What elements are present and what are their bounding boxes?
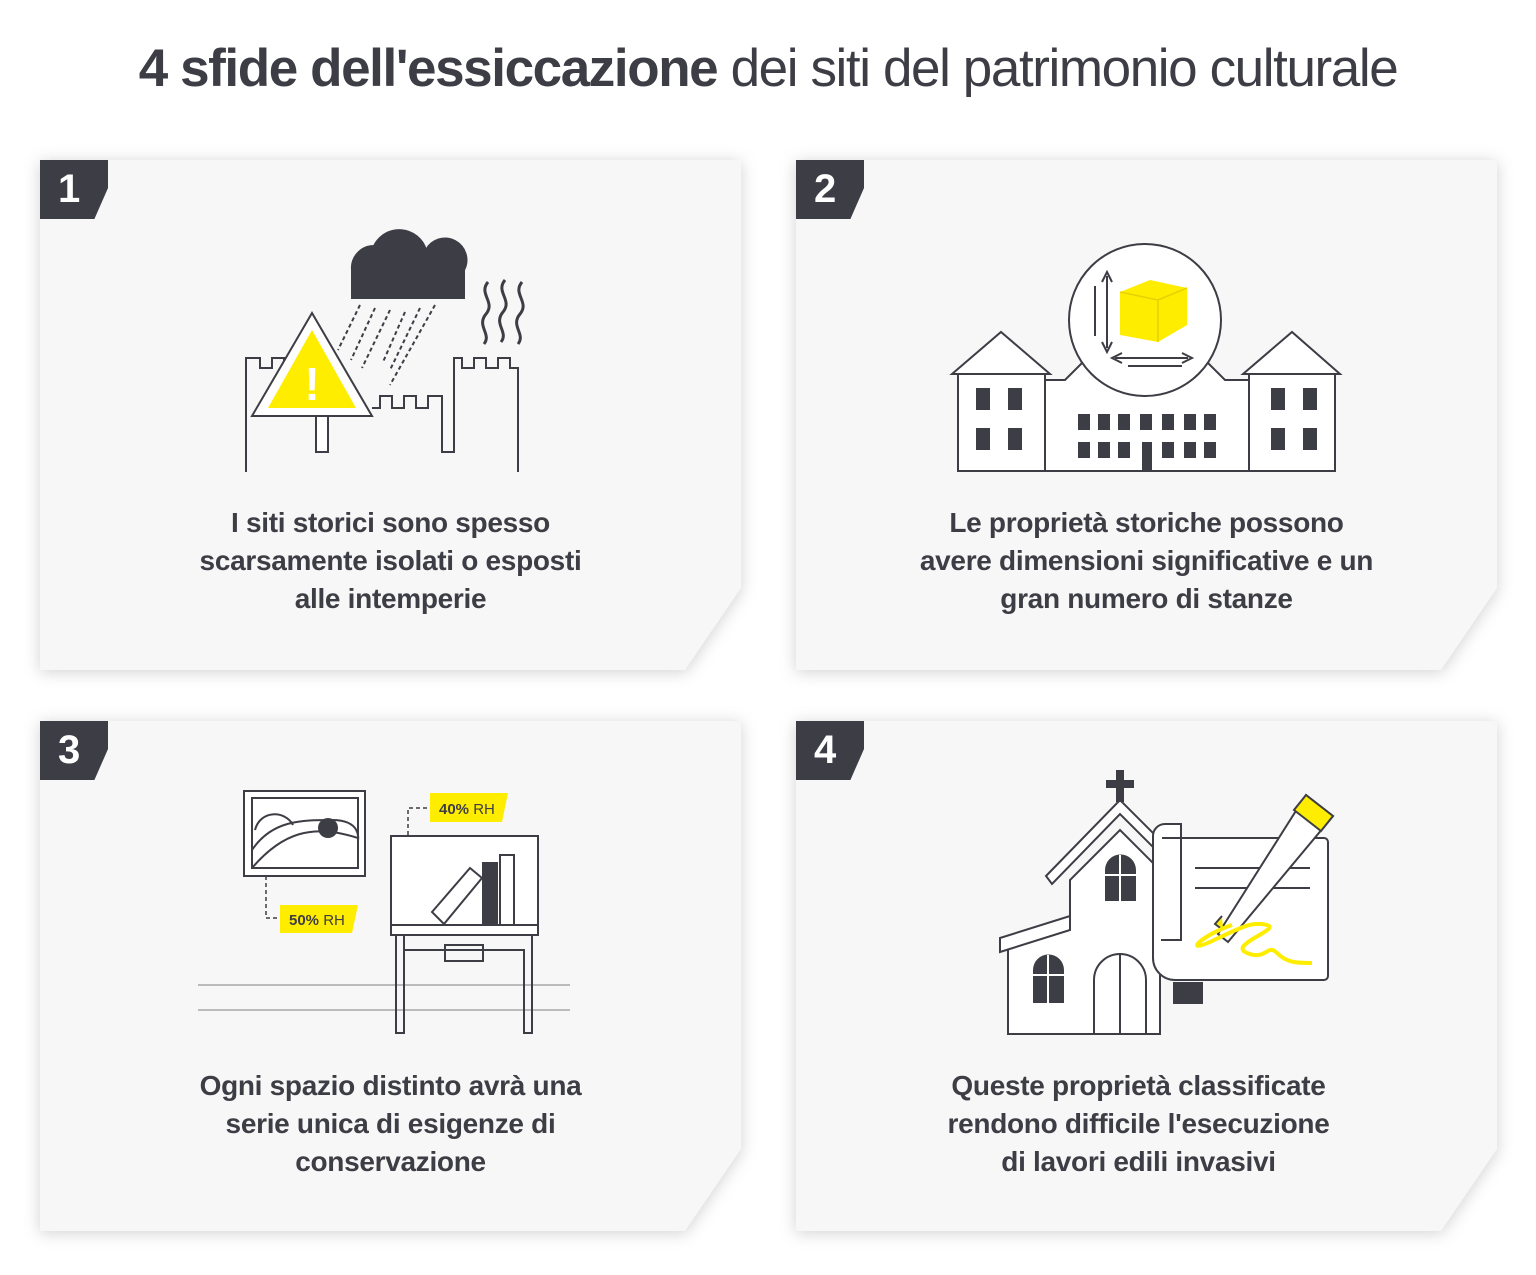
badge 2: [796, 160, 864, 219]
panel 2: [789, 155, 1504, 679]
text 3: [200, 1075, 582, 1172]
badge 1: [40, 160, 108, 219]
icon: weather castle: !: [304, 358, 320, 410]
badge 3: [40, 721, 108, 780]
badge 3: 3: [58, 728, 80, 772]
text 2: avere dimensioni significative e un: [920, 545, 1373, 576]
text 1: I siti storici sono spesso: [231, 507, 550, 538]
badge 2: 2: [814, 167, 836, 211]
panel 1: [33, 155, 748, 679]
panel 4: [789, 716, 1504, 1240]
text 4: rendono difficile l'esecuzione: [948, 1108, 1329, 1139]
icon: painting and cabinet with RH tags: 50% RH: [289, 912, 345, 929]
badge 1: 1: [58, 167, 80, 211]
icon: church and document with pen: [1000, 770, 1333, 1034]
text 3: serie unica di esigenze di: [226, 1108, 555, 1139]
title: 4 sfide dell'essiccazione dei siti del patrimonio culturale: [139, 39, 1397, 98]
text 4: Queste proprietà classificate: [951, 1070, 1326, 1101]
badge 4: 4: [814, 728, 836, 772]
text 4: [949, 1075, 1329, 1172]
text 2: gran numero di stanze: [1000, 583, 1293, 614]
icon: painting and cabinet with RH tags: 40% RH: [439, 801, 495, 818]
text 4: di lavori edili invasivi: [1001, 1146, 1276, 1177]
text 3: conservazione: [295, 1146, 486, 1177]
text 3: Ogni spazio distinto avrà una: [200, 1070, 581, 1101]
icon: weather castle: [246, 230, 523, 472]
badge 4: [796, 721, 864, 780]
icon: painting and cabinet with RH tags: [198, 791, 570, 1033]
panel 3: [33, 716, 748, 1240]
text 2: Le proprietà storiche possono: [949, 507, 1344, 538]
text 1: alle intemperie: [295, 583, 486, 614]
text 1: [200, 512, 580, 614]
text 2: [920, 512, 1372, 614]
text 1: scarsamente isolati o esposti: [200, 545, 581, 576]
icon: historic building with volume: [952, 244, 1340, 471]
